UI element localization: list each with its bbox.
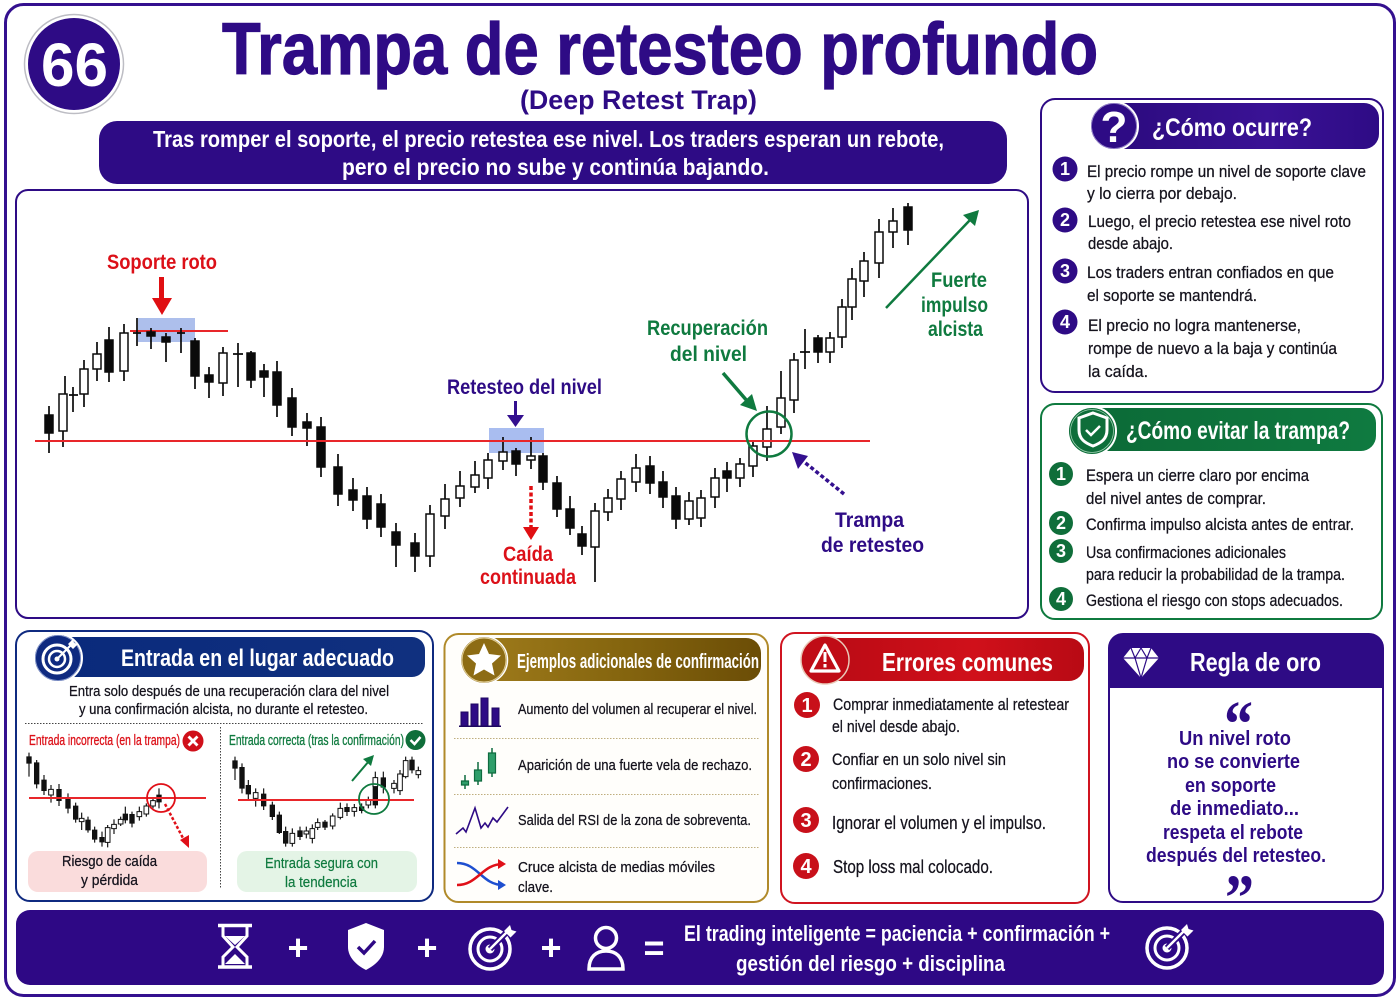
label: strong impulse: impulso: [921, 294, 988, 317]
arrow: purple down: [507, 401, 524, 427]
support line short: [130, 330, 228, 332]
rule text: [1146, 728, 1326, 867]
formula text: gestión del riesgo + disciplina: [736, 951, 1006, 976]
rule text: respeta el rebote: [1163, 822, 1303, 844]
description: Entra solo después de una recuperación clara del nivel: [69, 684, 389, 700]
icon: target: [470, 925, 516, 969]
tip 1: [1049, 462, 1310, 508]
heading: ¿Cómo ocurre?: [1152, 114, 1312, 142]
icon: question mark: [1090, 102, 1138, 152]
callout: safe entry: Entrada segura con: [265, 855, 378, 872]
step 2: desde abajo.: [1088, 234, 1173, 253]
mistake 2: Confiar en un solo nivel sin: [832, 750, 1006, 769]
label: correct entry: [229, 730, 426, 750]
mistake 4: 4: [800, 856, 812, 878]
step 2: [1052, 208, 1351, 253]
mistake 2: [793, 746, 1006, 793]
step 4: 4: [1060, 312, 1070, 332]
mistake 3: Ignorar el volumen y el impulso.: [832, 813, 1046, 833]
label: continued fall: [480, 543, 576, 589]
text: volume: Aumento del volumen al recuperar el nivel.: [518, 701, 757, 718]
step 1: El precio rompe un nivel de soporte clave: [1087, 162, 1366, 181]
arrow: recovery: [723, 373, 757, 411]
rule text: después del retesteo.: [1146, 845, 1326, 867]
label: strong impulse: Fuerte: [931, 269, 987, 292]
description: y una confirmación alcista, no durante el retesteo.: [79, 702, 368, 718]
panel: confirmation examples: [444, 634, 768, 902]
rule text: no se convierte: [1167, 751, 1300, 773]
mistake 1: el nivel desde abajo.: [832, 717, 960, 736]
label: wrong entry: Entrada incorrecta (en la trampa): [29, 733, 180, 749]
tip 4: Gestiona el riesgo con stops adecuados.: [1086, 592, 1343, 610]
panel: how to avoid: [1041, 404, 1382, 619]
header bar: [50, 637, 425, 677]
step 4: rompe de nuevo a la baja y continúa: [1088, 339, 1337, 358]
summary banner: Tras romper el soporte, el precio retestea ese nivel. Los traders esperan un rebote,: [153, 126, 944, 152]
number badge: 66: [41, 31, 108, 99]
step 4: [1052, 310, 1337, 381]
label: retest trap: [821, 509, 924, 557]
quote close: ”: [1225, 862, 1254, 935]
summary banner: [99, 121, 1007, 184]
tip 3: [1049, 539, 1345, 584]
icon: volume bars: [459, 698, 501, 727]
step 2: Luego, el precio retestea ese nivel roto: [1088, 212, 1351, 231]
tip 3: Usa confirmaciones adicionales: [1086, 544, 1286, 562]
label: retest trap: de retesteo: [821, 534, 924, 557]
plus: +: [287, 927, 309, 968]
mistake 2: 2: [800, 749, 812, 771]
mistake 4: Stop loss mal colocado.: [833, 857, 993, 877]
rule text: en soporte: [1185, 775, 1276, 797]
label: continued fall: Caída: [503, 543, 553, 566]
label: strong impulse: alcista: [928, 318, 983, 341]
label: strong impulse: [921, 269, 988, 341]
arrow: dotted purple: [792, 452, 844, 494]
arrow: dotted red down: [523, 486, 539, 540]
equals: =: [643, 927, 665, 968]
tip 1: Espera un cierre claro por encima: [1086, 467, 1310, 485]
callout: safe entry: [237, 851, 417, 892]
mistake 4: [793, 853, 993, 879]
summary banner: pero el precio no sube y continúa bajando.: [342, 154, 769, 180]
label: correct entry: Entrada correcta (tras la confirmación): [229, 733, 404, 749]
rule text: Un nivel roto: [1179, 728, 1291, 750]
tip 1: 1: [1056, 464, 1066, 484]
header bar: [1080, 408, 1376, 451]
rule text: de inmediato...: [1170, 798, 1299, 820]
tip 3: 3: [1056, 541, 1066, 561]
step 2: 2: [1060, 210, 1070, 230]
panel: golden rule: [1109, 634, 1383, 935]
text: moving averages: clave.: [518, 879, 553, 896]
label: wrong entry: [29, 730, 204, 752]
mistake 1: 1: [801, 695, 813, 717]
panel: how it happens: [1041, 99, 1383, 392]
label: level retest: Retesteo del nivel: [447, 376, 602, 399]
step 3: el soporte se mantendrá.: [1087, 286, 1257, 305]
icon: moving averages cross: [457, 859, 506, 890]
header: [1109, 634, 1383, 688]
panel: common mistakes: [781, 633, 1089, 903]
label: level recovery: [647, 317, 768, 366]
icon: hourglass: [218, 926, 252, 967]
subtitle: (Deep Retest Trap): [520, 85, 757, 115]
panel: right entry: [16, 631, 433, 901]
text: rejection candle: Aparición de una fuerte vela de rechazo.: [518, 757, 752, 774]
step 3: Los traders entran confiados en que: [1087, 263, 1334, 282]
description: [69, 684, 389, 718]
step 4: El precio no logra mantenerse,: [1088, 316, 1301, 335]
mini chart: correct entry: [233, 755, 421, 847]
number badge: [24, 14, 124, 114]
tip 4: 4: [1056, 589, 1066, 609]
icon: shield: [348, 923, 384, 970]
mini chart: wrong entry: [27, 753, 206, 848]
label: retest trap: Trampa: [835, 509, 904, 532]
header bar: [810, 638, 1084, 681]
title: Trampa de retesteo profundo: [222, 9, 1098, 90]
icon: target: [34, 634, 82, 682]
callout: safe entry: la tendencia: [285, 874, 358, 891]
arrow: strong impulse: [886, 210, 979, 308]
icon: person: [589, 928, 623, 969]
label: broken support: Soporte roto: [107, 251, 217, 274]
plus: +: [416, 927, 438, 968]
zone: broken support: [138, 318, 195, 342]
footer bar: [16, 910, 1384, 985]
icon: green candles: [462, 748, 496, 789]
text: moving averages: Cruce alcista de medias móviles: [518, 859, 715, 876]
step 1: y lo cierra por debajo.: [1087, 184, 1237, 203]
support line long: [35, 440, 870, 442]
tip 2: Confirma impulso alcista antes de entrar.: [1086, 516, 1354, 534]
header bar: [1100, 103, 1379, 149]
callout: fall risk: Riesgo de caída: [62, 853, 158, 870]
heading: Errores comunes: [882, 647, 1053, 677]
tip 3: para reducir la probabilidad de la trampa.: [1086, 566, 1345, 584]
icon: question mark: ?: [1101, 103, 1127, 152]
step 3: 3: [1060, 261, 1070, 281]
step 4: la caída.: [1088, 362, 1148, 381]
tip 2: 2: [1056, 513, 1066, 533]
arrow: red down: [152, 277, 172, 315]
icon: shield: [1068, 407, 1116, 455]
heading: Entrada en el lugar adecuado: [121, 645, 394, 672]
tip 2: [1049, 511, 1354, 535]
callout: fall risk: [28, 851, 207, 892]
heading: Regla de oro: [1190, 647, 1321, 677]
quote open: “: [1224, 688, 1253, 761]
callout: fall risk: y pérdida: [81, 872, 139, 889]
mistake 1: Comprar inmediatamente al retestear: [833, 695, 1069, 714]
mistake 3: 3: [800, 810, 812, 832]
label: continued fall: continuada: [480, 566, 576, 589]
text: moving averages: [518, 859, 715, 896]
mistake 2: confirmaciones.: [832, 774, 932, 793]
step 1: [1052, 156, 1366, 203]
mistake 3: [793, 807, 1046, 833]
header bar: [470, 638, 761, 681]
plus: +: [540, 927, 562, 968]
formula text: El trading inteligente = paciencia + confirmación +: [684, 921, 1110, 946]
label: level recovery: Recuperación: [647, 317, 768, 340]
text: RSI: Salida del RSI de la zona de sobreventa.: [518, 812, 751, 829]
label: level recovery: del nivel: [670, 343, 747, 366]
heading: Ejemplos adicionales de confirmación: [517, 651, 759, 673]
panel: main candlestick chart: [16, 190, 1028, 618]
circle: recovery candle: [746, 412, 792, 456]
icon: star: [460, 636, 508, 684]
tip 4: [1049, 587, 1343, 611]
candlestick series: [45, 203, 912, 582]
icon: warning: [801, 636, 849, 684]
tip 1: del nivel antes de comprar.: [1086, 490, 1266, 508]
icon: target right: [1147, 924, 1194, 968]
step 1: 1: [1060, 159, 1070, 179]
icon: RSI line: [456, 807, 508, 834]
icon: diamond: [1123, 648, 1159, 678]
formula text: [684, 921, 1110, 976]
mistake 1: [794, 692, 1069, 736]
zone: retest: [489, 428, 544, 453]
step 3: [1052, 258, 1334, 305]
